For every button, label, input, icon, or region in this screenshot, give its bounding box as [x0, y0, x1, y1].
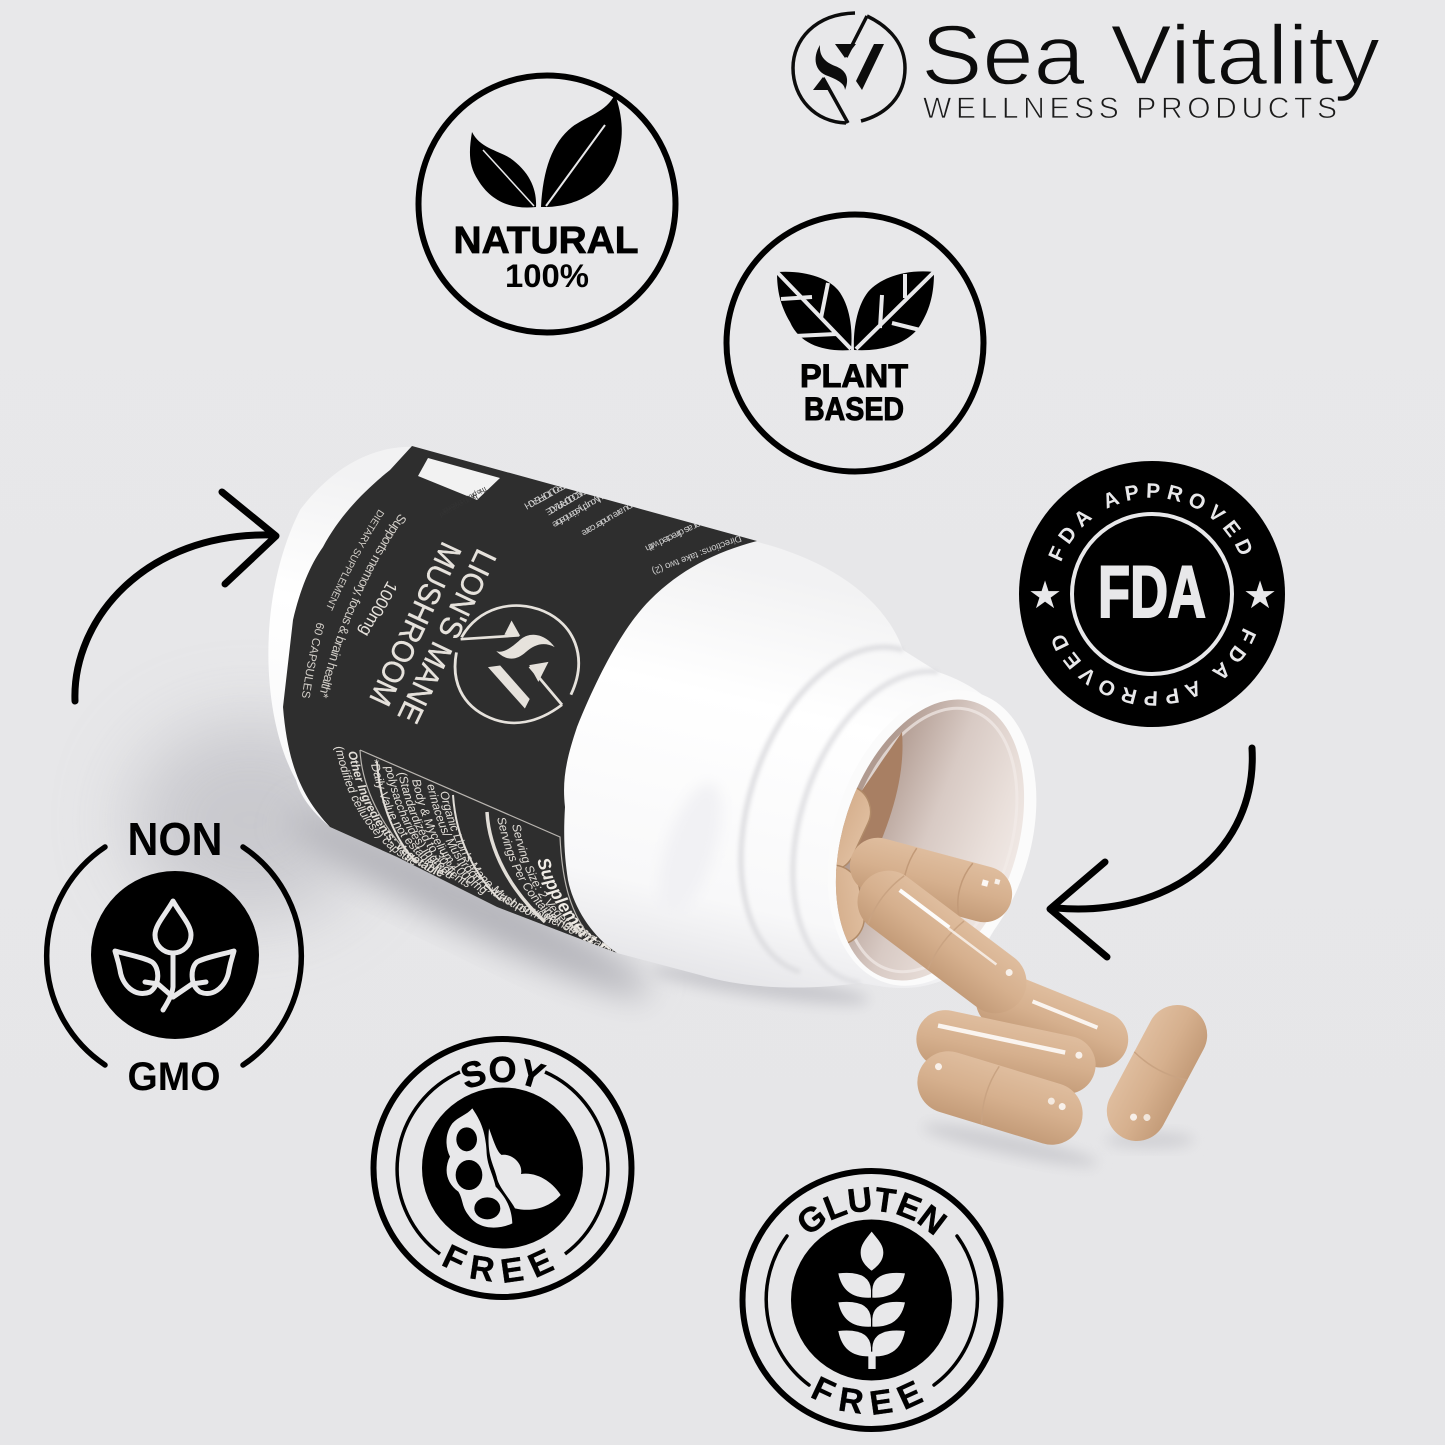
label logo emblem: [454, 604, 580, 724]
outer ring: [374, 1039, 632, 1297]
GMO text: GMO: [128, 1055, 220, 1099]
product name line 2: MUSHROOM: [362, 537, 468, 711]
label: NATURAL: [454, 220, 638, 262]
white label patch: been evaluated: [438, 492, 478, 518]
icon: wheat: [838, 1232, 905, 1369]
brand name: Sea Vitality: [921, 8, 1380, 102]
capsule: back right: [844, 831, 1018, 929]
capsule: lower behind: [967, 964, 1137, 1076]
facts panel: Supplement Facts: [538, 858, 610, 950]
capsule: right alone: [1096, 994, 1218, 1152]
SOY text: SOY: [462, 1056, 547, 1088]
upside-down directions text: KEEP OUT OF REACH: [522, 476, 573, 511]
capsule: deep inside: [858, 732, 902, 846]
facts panel: Servings Per Container: 30: [498, 818, 577, 934]
badge: natural 100%: [418, 76, 676, 332]
shoulder ring line: [741, 647, 903, 972]
body soft shade: [646, 776, 734, 924]
bottle interior: [802, 675, 1058, 1005]
label line 2: BASED: [804, 391, 904, 427]
capsule: at rim upper: [836, 788, 872, 871]
badge: FDA approved: [1019, 461, 1285, 727]
facts panel: Organic Lion's Mane Mushroom Hericium: [440, 792, 588, 937]
bottle body: [268, 447, 1031, 988]
facts panel: (Standardized to 30%: [396, 772, 456, 872]
upside-down directions text: [524, 486, 742, 575]
label: [283, 446, 757, 953]
upside-down directions text: consult your physician before: [550, 485, 616, 530]
icon: two leaves: [470, 94, 622, 208]
facts panel: [333, 746, 616, 953]
arrow: right pointing to capsules: [1050, 748, 1252, 957]
label background: [283, 446, 757, 953]
logo emblem: [793, 13, 905, 123]
upside-down directions text: STORE IN A COOL, DRY PLACE: [544, 477, 601, 517]
tagline: WELLNESS PRODUCTS: [923, 92, 1337, 125]
black disc: [1019, 461, 1285, 727]
icon: soybean pod: [446, 1108, 561, 1228]
dietary supplement: DIETARY SUPPLEMENT: [326, 510, 384, 611]
facts panel: (modified cellulose) capsule: [333, 746, 416, 865]
capsule count: 60 CAPSULES: [302, 623, 324, 698]
inner ring: [1072, 514, 1232, 674]
badge: soy free: [370, 1036, 634, 1300]
facts panel: polysaccharides) ingredients: [382, 766, 470, 887]
inner ring arcs: [397, 1072, 608, 1254]
star right: ★: [1243, 575, 1277, 617]
dosage: 1000mg: [355, 578, 401, 640]
white label patch: This product has not: [441, 484, 488, 514]
black disc: [422, 1088, 583, 1248]
icon: veined leaves: [775, 270, 936, 350]
NON text: NON: [128, 813, 222, 865]
capsules inside bottle mouth: [836, 732, 902, 944]
black disc: [791, 1220, 952, 1380]
black disc: [91, 871, 259, 1039]
facts panel: *Daily Value not established: [371, 759, 455, 879]
ring: [726, 214, 984, 472]
capsule: at rim lower: [836, 864, 865, 944]
label line 1: PLANT: [800, 358, 908, 394]
outer ring: [742, 1171, 1000, 1429]
curved text top: FDA APPROVED: [1048, 483, 1252, 562]
percentage: 100%: [505, 258, 589, 294]
arrow: top left pointing to bottle: [75, 492, 276, 701]
badge: gluten free: [740, 1168, 1004, 1432]
side arcs: [47, 847, 301, 1065]
FREE text: FREE: [811, 1376, 924, 1415]
product name line 1: LION'S MANE: [391, 544, 503, 729]
badge: non GMO: [47, 813, 301, 1099]
facts panel: erinaceus/ Mushroom extract powder: [428, 784, 556, 921]
capsule: middle: [911, 1005, 1101, 1099]
capsule: front spilling: [845, 858, 1039, 1026]
star left: ★: [1028, 575, 1062, 617]
badge: plant based: [726, 214, 984, 472]
ring: [418, 76, 676, 332]
upside-down directions text: if you are under care: [579, 496, 641, 538]
interior inner lip: [812, 686, 1048, 994]
inner ring arcs: [766, 1236, 977, 1385]
upside-down directions text: or as directed with: [643, 518, 702, 554]
facts panel: Body & Mycelium 1000mg: [412, 780, 488, 895]
capsules: [836, 732, 1208, 1145]
icon: sprout: [115, 901, 234, 1010]
upside-down directions text: Directions: take two (2): [650, 532, 743, 577]
curved text bottom: FDA APPROVED: [1052, 628, 1256, 706]
benefit line: Supports memory, focus & brain health*: [320, 514, 406, 698]
product bottle: [268, 446, 1036, 988]
neck ring line: [793, 671, 938, 983]
bottle shadow on surface: [130, 720, 1195, 1173]
GLUTEN text: GLUTEN: [798, 1186, 948, 1236]
white label patch: [418, 458, 500, 500]
FREE text: FREE: [442, 1244, 555, 1283]
facts panel: Other Ingredients: Vegetable: [348, 752, 444, 876]
mouth rim: [792, 663, 1072, 1013]
facts panel: Serving Size: 2 Vegetable Capsules: [512, 824, 616, 953]
capsule: front low: [910, 1044, 1090, 1152]
FDA mark: FDA: [1098, 552, 1206, 633]
logo: Sea Vitality: [793, 8, 1380, 125]
